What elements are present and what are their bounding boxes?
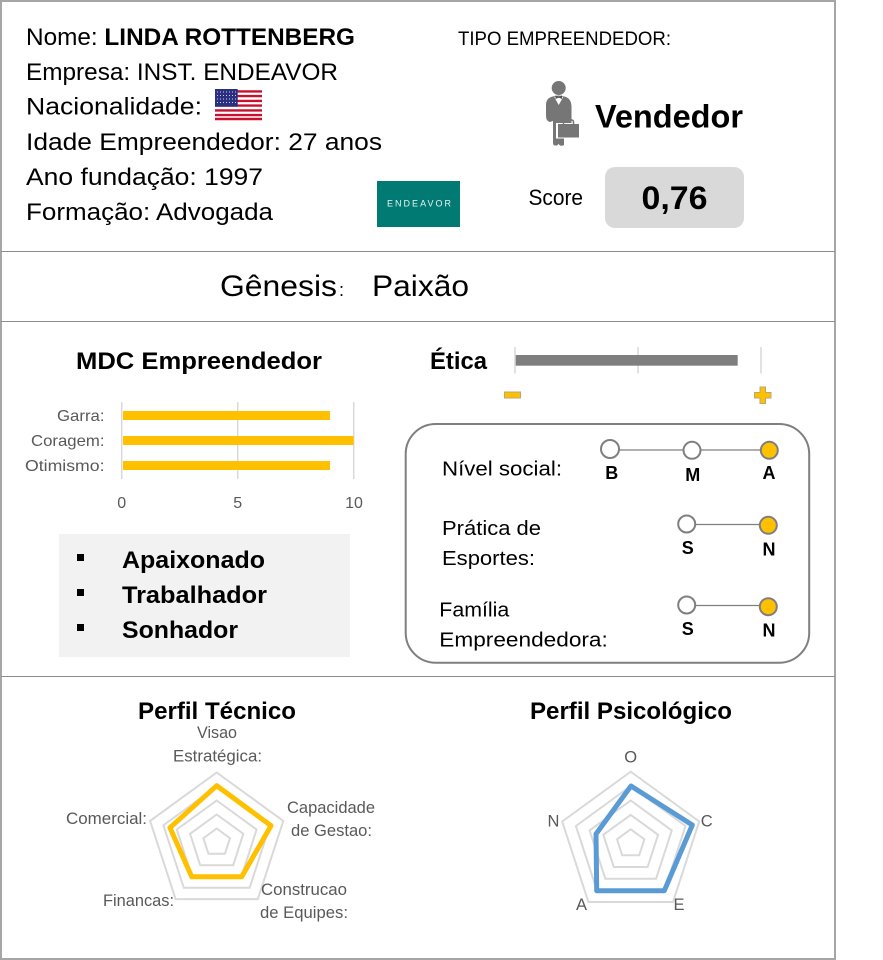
education line: Formação: Advogada xyxy=(26,199,274,226)
radar chart: technical profile: de Equipes: xyxy=(260,904,348,922)
panel: genesis: Paixão xyxy=(372,270,469,303)
bar chart: MDC xyxy=(25,402,363,512)
heading: MDC Empreendedor: MDC Empreendedor xyxy=(76,348,322,375)
age line: Idade Empreendedor: 27 anos xyxy=(26,129,382,156)
heading: Ética: Ética xyxy=(430,347,488,375)
panel: background attributes xyxy=(406,424,809,663)
radar chart: technical profile xyxy=(66,724,375,922)
logo: Endeavor xyxy=(377,181,460,227)
heading: Perfil Psicológico: Perfil Psicológico xyxy=(530,698,732,725)
sports practice: Esportes: xyxy=(442,548,535,570)
logo: Endeavor: ENDEAVOR xyxy=(387,198,452,208)
entrepreneurial family xyxy=(439,596,777,652)
type heading: TIPO EMPREENDEDOR: xyxy=(458,29,671,50)
panel: traits list: Trabalhador xyxy=(122,582,267,609)
panel: traits list xyxy=(59,534,350,657)
founding year line: Ano fundação: 1997 xyxy=(26,164,263,191)
social level: B xyxy=(605,463,618,483)
bar chart: MDC: 10 xyxy=(345,495,363,512)
social level: M xyxy=(685,465,700,485)
icon: plus xyxy=(754,387,771,404)
radar chart: psychological profile: C xyxy=(701,813,713,831)
radar chart: psychological profile: N xyxy=(548,813,559,831)
radar chart: technical profile: Construcao xyxy=(261,881,347,899)
name line: Nome: LINDA ROTTENBERG xyxy=(26,24,355,51)
panel: entrepreneur identity xyxy=(26,24,382,226)
bar chart: MDC: 0 xyxy=(117,495,126,512)
company line: Empresa: INST. ENDEAVOR xyxy=(26,59,338,86)
panel: traits list: Sonhador xyxy=(122,617,238,644)
type name: Vendedor xyxy=(595,98,743,134)
bar chart: MDC: 5 xyxy=(233,495,242,512)
panel: genesis: : xyxy=(339,280,344,300)
radar chart: technical profile: Visao xyxy=(197,724,237,742)
entrepreneurial family: Família xyxy=(439,600,510,622)
score label: Score xyxy=(528,185,583,210)
entrepreneurial family: Empreendedora: xyxy=(439,630,608,652)
icon: salesman with briefcase xyxy=(546,81,580,146)
panel: entrepreneur type xyxy=(458,29,744,228)
sports practice: N xyxy=(762,540,776,560)
bar chart: MDC: Coragem: xyxy=(31,433,104,450)
entrepreneurial family: S xyxy=(682,619,694,639)
sports practice: Prática de xyxy=(442,518,541,540)
radar chart: psychological profile: A xyxy=(576,896,587,914)
panel: traits list: Apaixonado xyxy=(122,547,265,574)
radar chart: technical profile: Financas: xyxy=(103,892,174,910)
social level: A xyxy=(762,463,776,483)
radar chart: technical profile: Estratégica: xyxy=(173,748,262,766)
sports practice xyxy=(442,516,777,570)
icon: US flag xyxy=(215,89,262,120)
radar chart: technical profile: de Gestao: xyxy=(291,822,372,840)
radar chart: technical profile: Capacidade xyxy=(287,799,375,817)
bar chart: MDC: Otimismo: xyxy=(25,458,104,475)
score box xyxy=(605,167,744,228)
social level xyxy=(442,440,778,485)
entrepreneurial family: N xyxy=(762,621,776,641)
heading: Perfil Técnico: Perfil Técnico xyxy=(138,698,296,725)
score box: 0,76 xyxy=(642,180,708,216)
panel: genesis xyxy=(220,270,469,303)
chart: ethics bar xyxy=(504,347,771,404)
bar chart: MDC: Garra: xyxy=(57,408,104,425)
social level: Nível social: xyxy=(442,459,562,481)
icon: minus xyxy=(504,392,520,398)
radar chart: psychological profile: O xyxy=(624,749,637,767)
radar chart: psychological profile xyxy=(548,749,713,914)
panel: genesis: Gênesis xyxy=(220,270,337,303)
radar chart: psychological profile: E xyxy=(673,896,685,914)
sports practice: S xyxy=(682,538,694,558)
radar chart: technical profile: Comercial: xyxy=(66,810,147,828)
nationality line: Nacionalidade: xyxy=(26,94,202,120)
